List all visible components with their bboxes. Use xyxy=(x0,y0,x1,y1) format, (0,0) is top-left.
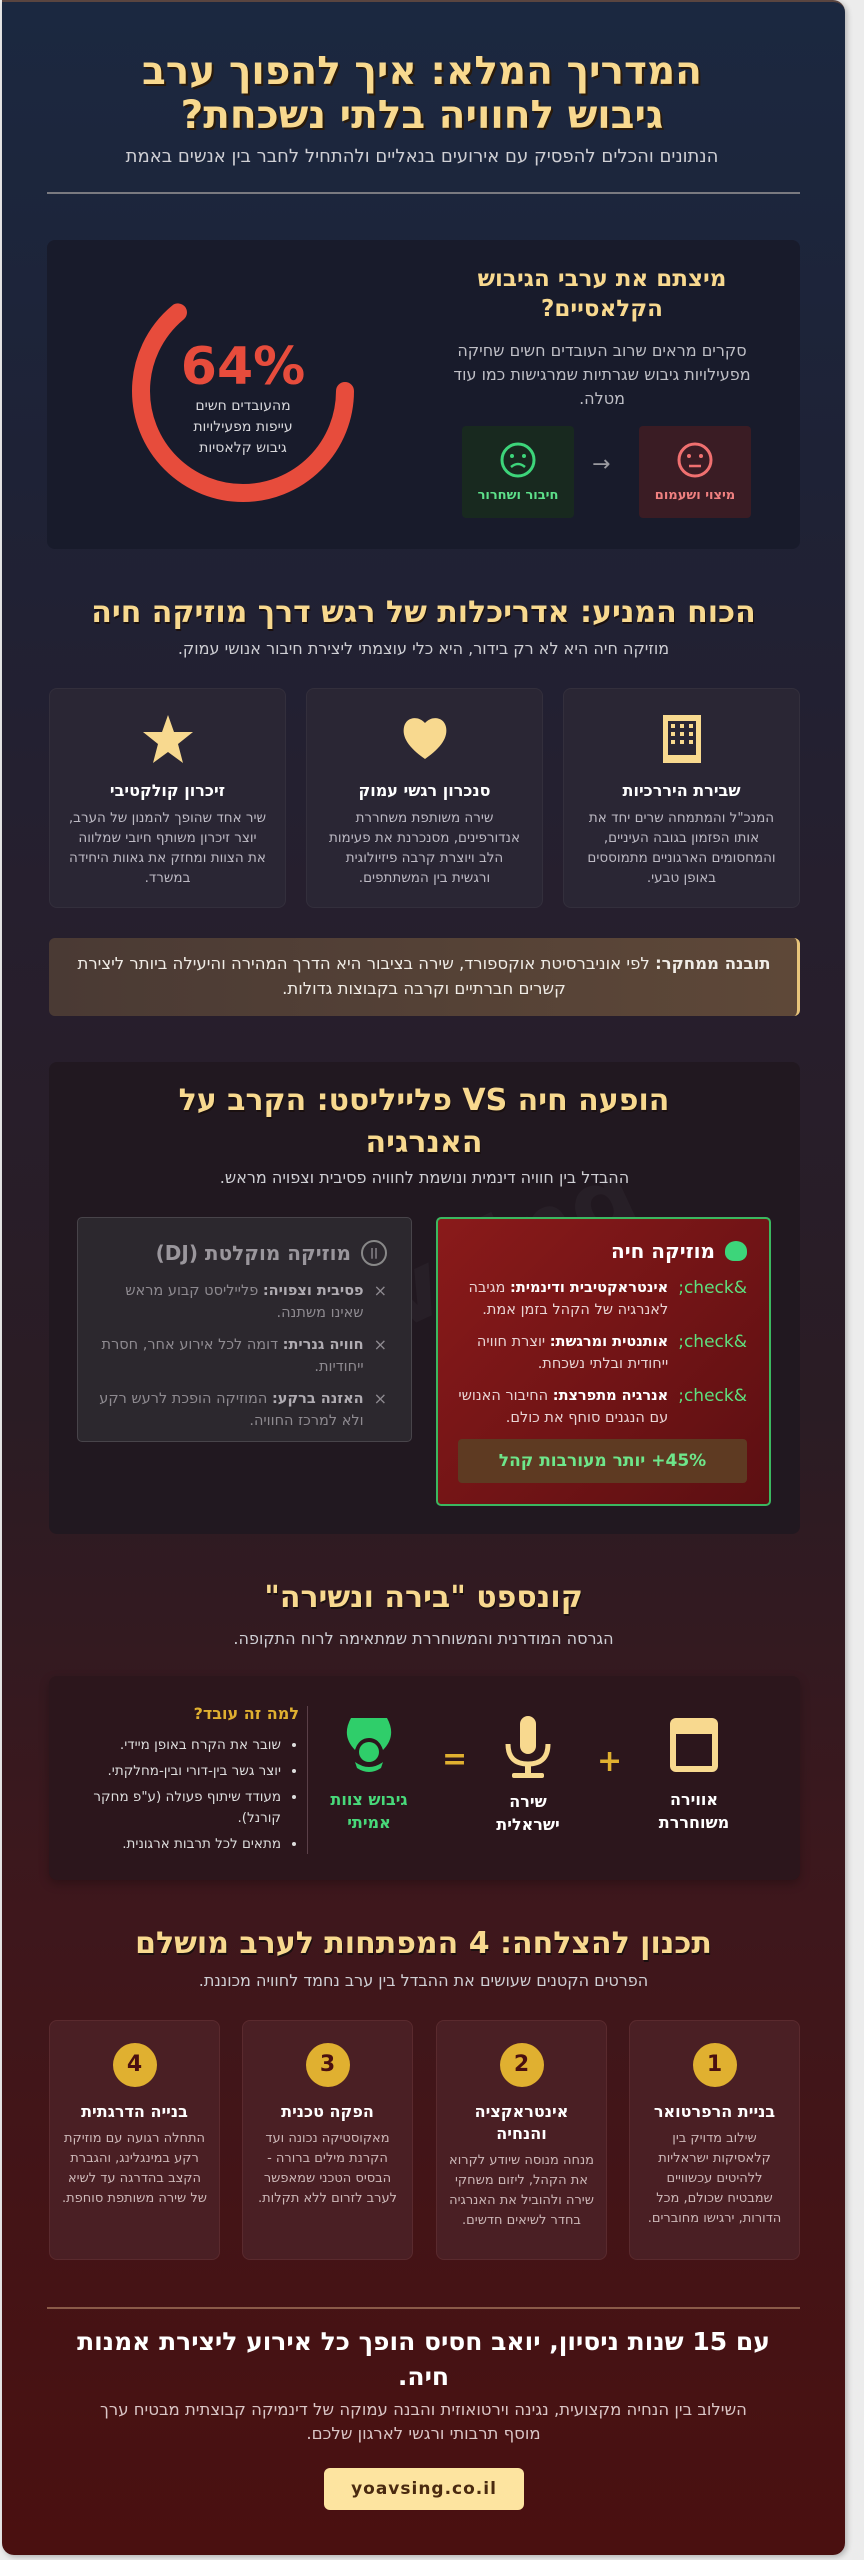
plus: + xyxy=(597,1744,622,1779)
header: מוזיקה מוקלטת (DJ) xyxy=(156,1241,351,1265)
box: recorded music: פסיבית וצפויה: פלייליסט קבוע מראש שאינו משתנה. xyxy=(125,1283,364,1321)
callout: research insight: תובנה ממחקר: לפי אוניברסיטת אוקספורד, שירה בציבור היא הדרך המהירה והיעילה ביותר ליצירת קשרים חברתיים וקרבה בקבוצות גדולות. xyxy=(77,954,771,998)
box: live music: &check; xyxy=(678,1332,747,1352)
box: recorded music xyxy=(77,1217,412,1442)
card: emotional sync: שירה משותפת משחררת אנדורפינים, מסנכרנת את פעימות הלב ויוצרת קרבה פיזיולוגית ורגשית בין המשתתפים. xyxy=(329,810,520,886)
title: המדריך המלא: איך להפוך ערב xyxy=(142,49,702,94)
icon: microphone: ישראלית xyxy=(496,1815,560,1834)
heading: exhausted: הקלאסיים? xyxy=(541,296,663,322)
step 2: והנחיה xyxy=(496,2124,547,2143)
heading: exhausted xyxy=(478,266,726,322)
step 2 xyxy=(436,2020,607,2260)
subtitle: ההבדל בין חוויה דינמית ונושמת לחוויה פסיבית וצפויה מראש. xyxy=(220,1168,629,1187)
step 2: 2 xyxy=(514,2052,529,2077)
icon: microphone xyxy=(496,1716,560,1834)
subtitle: הנתונים והכלים להפסיק עם אירועים בנאליים ולהתחיל לחבר בין אנשים באמת xyxy=(126,146,718,167)
closing heading: עם 15 שנות ניסיון, יואב חסיס הופך כל אירוע ליצירת אמנות חיה. xyxy=(77,2327,770,2391)
watermark: yoavsing xyxy=(198,1141,653,1428)
step 4: בנייה הדרגתית xyxy=(81,2102,188,2121)
card: collective memory xyxy=(49,688,286,908)
heading: 4 keys: תכנון להצלחה: 4 המפתחות לערב מושלם xyxy=(135,1926,712,1961)
button: website xyxy=(324,2468,524,2510)
step 3: מאקוסטיקה נכונה ועד הקרנת מילים ברורה - הבסיס הטכני שמאפשר לערב לזרום ללא תקלות. xyxy=(258,2131,397,2206)
box: boredom xyxy=(639,426,751,518)
box: live music: &check; xyxy=(678,1386,747,1406)
paragraph: סקרים מראים שרוב העובדים חשים שחיקה מפעילויות גיבוש שגרתיות שמרגישות כמו עוד מטלה. xyxy=(453,341,751,408)
donut chart 64%: 64% xyxy=(181,337,305,397)
donut chart 64% xyxy=(132,303,354,502)
step 4: התחלה רגועה עם מוזיקת רקע במינגלינג, והגברת הקצב בהדרגה עד לשיא של שירה משותפת סוחפת. xyxy=(62,2131,207,2206)
box: recorded music: × xyxy=(374,1281,387,1300)
panel: live vs playlist xyxy=(49,1062,800,1534)
card: collective memory: שיר אחד שהופך להמנון של הערב, יוצר זיכרון משותף חיובי שמלווה את הצוות ומחזק את גאוות היחידה במשרד. xyxy=(69,810,266,886)
box: connection xyxy=(462,426,574,518)
heading: live music power: הכוח המניע: אדריכלות של רגש דרך מוזיקה חיה xyxy=(91,595,756,630)
subtitle: מוזיקה חיה היא לא רק בידור, היא כלי עוצמתי ליצירת חיבור אנושי עמוק. xyxy=(178,639,669,658)
step 2: מנחה מנוסה שיודע לקרוא את הקהל, ליזום משחקי שירה ולהוביל את האנרגיה בחדר לשיאים חדשים. xyxy=(449,2153,594,2228)
icon: microphone: שירה xyxy=(509,1792,547,1811)
list: why it works: מעודד שיתוף פעולה (ע"פ מחקר קורנל). xyxy=(93,1789,281,1826)
step 1: בניית הרפרטואר xyxy=(654,2102,775,2121)
heading: beer and singing concept: קונספט "בירה ונשירה" xyxy=(264,1580,583,1615)
step 3: 3 xyxy=(320,2052,335,2077)
closing paragraph: השילוב בין הנחיה מקצועית, נגינה וירטואוזית והבנה עמוקה של דינמיקה קבוצתית מבטיח ערך מוסף תרבותי ורגשי לארגון שלכם. xyxy=(100,2400,747,2443)
step 4 xyxy=(49,2020,220,2260)
button: website: yoavsing.co.il xyxy=(351,2479,497,2499)
stat: +45% xyxy=(458,1439,747,1483)
box: live music: אינטראקטיבית ודינמית: מגיבה לאנרגיה של הקהל בזמן אמת. xyxy=(468,1280,668,1318)
header: || xyxy=(370,1246,378,1259)
step 4: 4 xyxy=(127,2052,142,2077)
step 2: אינטראקציה xyxy=(475,2102,568,2121)
equals: = xyxy=(442,1742,467,1777)
box: recorded music: × xyxy=(374,1335,387,1354)
title: גיבוש לחוויה בלתי נשכחת? xyxy=(181,93,663,138)
panel: formula xyxy=(49,1676,800,1880)
heading: הופעה חיה VS פלייליסט: הקרב על האנרגיה xyxy=(179,1083,669,1160)
donut chart 64%: גיבוש קלאסיות xyxy=(199,440,287,456)
card: emotional sync xyxy=(306,688,543,908)
box: recorded music: חוויה גנרית: דומה לכל אירוע אחר, חסרת ייחודיות. xyxy=(102,1337,364,1375)
step 1 xyxy=(629,2020,800,2260)
box: live music: אותנטית ומרגשת: יוצרת חוויה ייחודית ובלתי נשכחת. xyxy=(477,1334,668,1372)
icon: atmosphere: אווירה xyxy=(670,1790,718,1809)
card: breaking hierarchies: שבירת היררכיות xyxy=(623,781,740,800)
card: breaking hierarchies xyxy=(563,688,800,908)
header: מוזיקה חיה xyxy=(611,1239,715,1263)
callout: research insight xyxy=(49,938,800,1016)
box: recorded music: האזנה ברקע: המוזיקה הופכת לרעש רקע ולא למרכז החוויה. xyxy=(99,1391,364,1429)
icon: team: גיבוש צוות xyxy=(330,1790,408,1809)
subtitle: הגרסה המודרנית והמשוחררת שמתאימה לרוח התקופה. xyxy=(233,1629,614,1648)
panel: classic events stat xyxy=(47,240,800,549)
donut chart 64%: מהעובדים חשים xyxy=(195,398,291,414)
list: why it works: יוצר גשר בין-דורי ובין-מחלקתי. xyxy=(108,1763,281,1779)
step 1: 1 xyxy=(707,2052,722,2077)
step 1: שילוב מדויק בין קלאסיקות ישראליות ללהיטים עכשוויים שמבטיח שכולם, מכל הדורות, ירגישו מחוברים. xyxy=(648,2131,781,2226)
box: live music: &check; xyxy=(678,1278,747,1298)
subtitle: הפרטים הקטנים שעושים את ההבדל בין ערב נחמד לחוויה מכוננת. xyxy=(199,1971,648,1990)
icon: team xyxy=(330,1718,408,1832)
icon: atmosphere: משוחררת xyxy=(659,1813,729,1832)
list: why it works: שובר את הקרח באופן מיידי. xyxy=(120,1737,281,1753)
icon: star xyxy=(143,715,193,763)
donut chart 64%: עייפות מפעילויות xyxy=(193,419,293,435)
list: why it works: למה זה עובד? xyxy=(194,1704,299,1723)
card: emotional sync: סנכרון רגשי עמוק xyxy=(358,781,491,800)
list: why it works: מתאים לכל תרבות ארגונית. xyxy=(122,1836,281,1852)
card: collective memory: זיכרון קולקטיבי xyxy=(110,781,225,800)
icon: heart xyxy=(404,718,446,759)
title xyxy=(142,49,702,138)
icon: atmosphere xyxy=(658,1718,729,1832)
box: boredom: מיצוי ושעמום xyxy=(655,488,735,503)
arrow: → xyxy=(592,452,610,477)
step 3: הפקה טכנית xyxy=(281,2102,374,2121)
stat: +45%: 45%+ יותר מעורבות קהל xyxy=(499,1451,706,1471)
box: connection: חיבור ושחרור xyxy=(478,488,558,503)
step 3 xyxy=(242,2020,413,2260)
heading: exhausted: מיצתם את ערבי הגיבוש xyxy=(478,266,726,292)
icon: building xyxy=(663,715,701,763)
card: breaking hierarchies: המנכ"ל והמתמחה שרים יחד את אותו הפזמון בגובה העיניים, והמחסומים הארגוניים מתמוססים באופן טבעי. xyxy=(587,810,776,886)
icon: team: אמיתי xyxy=(347,1813,391,1832)
list: why it works xyxy=(93,1704,299,1852)
box: live music xyxy=(436,1217,771,1506)
box: recorded music: × xyxy=(374,1389,387,1408)
box: live music: אנרגיה מתפרצת: החיבור האנושי עם הנגנים סוחף את כולם. xyxy=(458,1388,668,1426)
